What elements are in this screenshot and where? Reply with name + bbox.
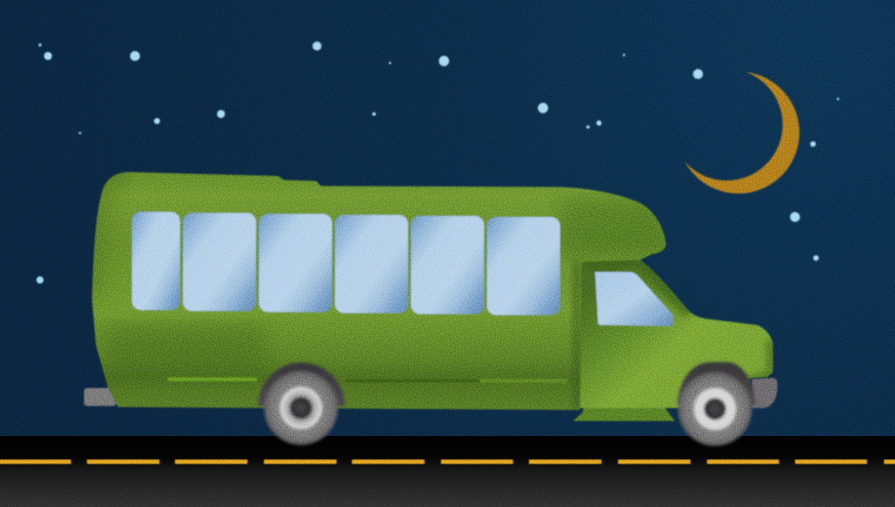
rear bumper	[84, 388, 116, 406]
cab shading	[582, 260, 773, 385]
stars	[36, 42, 839, 284]
rear wheel arch	[258, 362, 345, 406]
side stripes	[168, 378, 567, 382]
front hub centre	[704, 398, 726, 420]
body edge shading	[92, 172, 670, 410]
front hub	[694, 388, 736, 430]
road	[0, 436, 895, 507]
windshield	[595, 272, 673, 326]
rear tyre	[264, 371, 338, 445]
front bumper	[752, 378, 778, 408]
bus body	[92, 172, 670, 410]
step under cab	[573, 408, 675, 421]
front wheel	[677, 362, 755, 446]
bus	[84, 172, 778, 446]
crescent moon	[685, 72, 799, 194]
side windows	[132, 212, 560, 315]
yellow centre line	[0, 460, 895, 464]
front wheel arch	[677, 362, 755, 405]
rear hub	[280, 387, 322, 429]
cab	[580, 260, 773, 408]
road surface	[0, 436, 895, 507]
rear wheel	[258, 362, 345, 445]
front tyre	[678, 372, 752, 446]
rear hub centre	[290, 397, 312, 419]
